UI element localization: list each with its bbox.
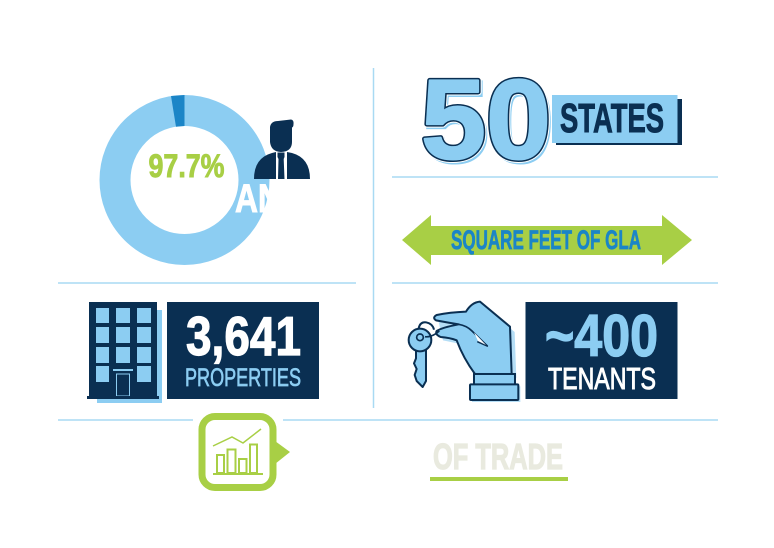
big number 50: 50 (421, 56, 551, 182)
tenants box: TENANTS (548, 361, 656, 396)
properties box: PROPERTIES (185, 364, 301, 392)
panel: trade (202, 416, 568, 488)
panel: square feet arrow (402, 215, 692, 265)
icon: businessman (254, 120, 310, 179)
panel: properties (87, 302, 319, 403)
icon: hand holding key (409, 302, 520, 402)
tenants box (526, 302, 678, 399)
panel: 50 states (421, 56, 682, 185)
arrow label: SQUARE FEET OF GLA (451, 225, 641, 255)
panel: tenants (409, 302, 678, 402)
trade label: OF TRADE (433, 436, 563, 477)
properties box (167, 302, 319, 399)
icon: chart speech bubble (202, 416, 290, 488)
properties box: 3,641 (186, 305, 301, 367)
big number 50: 50 (421, 56, 551, 182)
big number 50: 50 (421, 56, 551, 182)
icon: building (87, 302, 162, 403)
states label box: STATES (560, 95, 664, 141)
panel: tenant share donut (115, 95, 310, 250)
double arrow (402, 215, 692, 265)
big number 50: 50 (423, 59, 553, 185)
clipped label: AN (235, 177, 281, 221)
trade underline (430, 477, 568, 481)
donut chart (115, 95, 254, 250)
states label box (552, 95, 682, 145)
tenants box: ~400 (545, 303, 658, 369)
percentage value: 97.7% (148, 148, 224, 184)
